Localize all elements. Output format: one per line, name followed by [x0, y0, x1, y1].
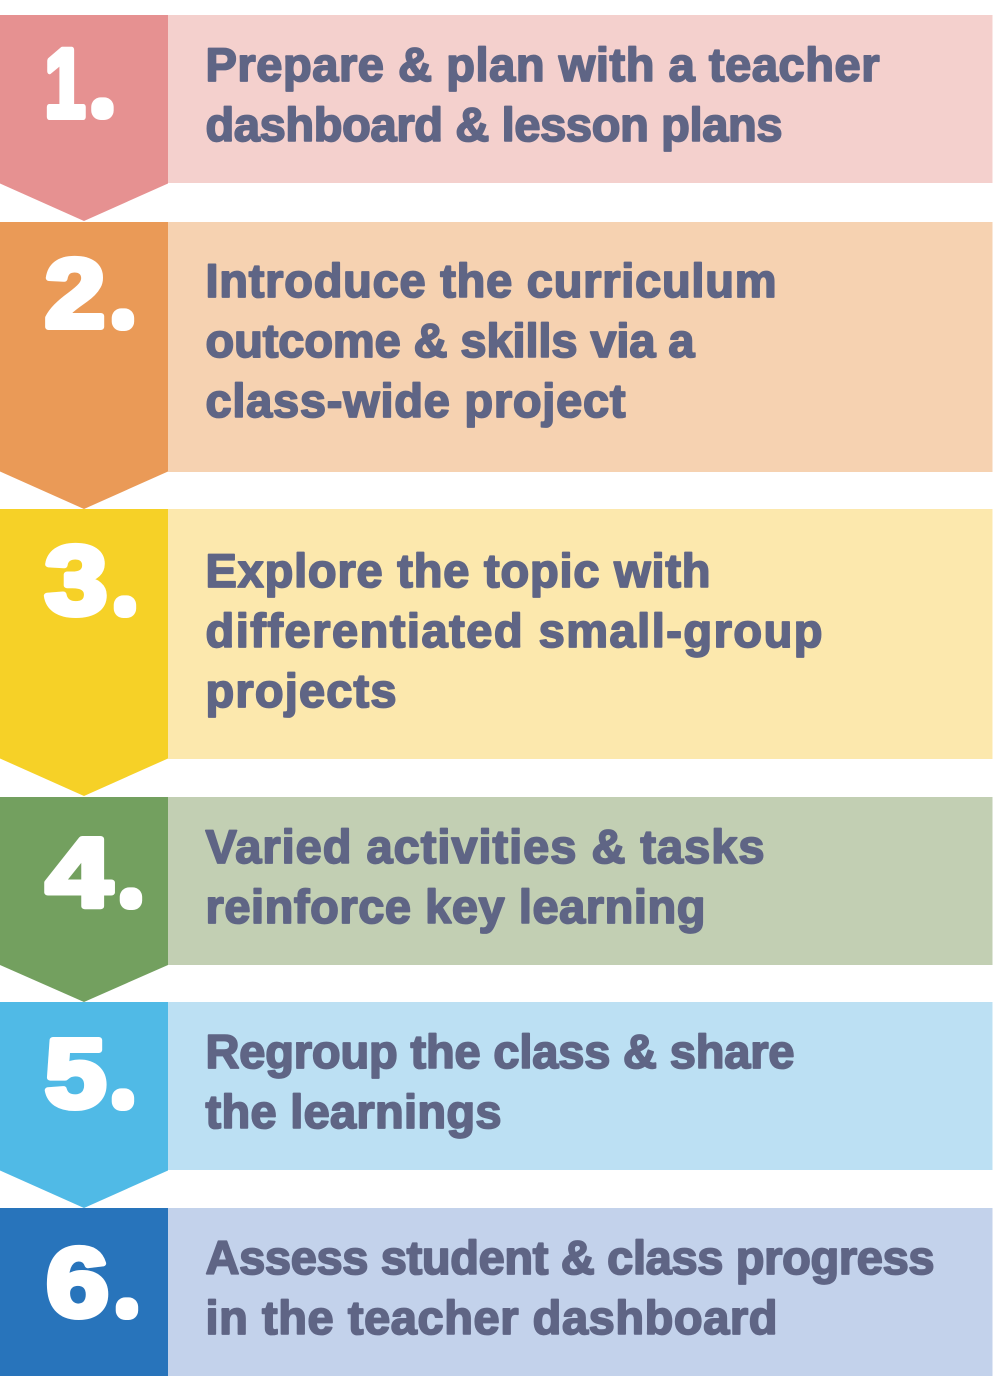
text: step 2: class-wide project — [206, 374, 626, 427]
arrow: step 1 — [0, 15, 168, 221]
text: step 5: Regroup the class & share — [206, 1025, 794, 1078]
number 6: 6 — [46, 1229, 109, 1337]
step 6 band — [168, 1208, 992, 1376]
number 1: 1 — [45, 30, 85, 138]
step 2 band — [168, 222, 992, 472]
panel: step 6 — [0, 1208, 992, 1376]
panel: step 1 — [0, 15, 992, 221]
text: step 4: Varied activities & tasks — [206, 820, 764, 873]
arrow: step 4 — [0, 797, 168, 1002]
text: step 4 — [206, 820, 764, 933]
text: step 6: in the teacher dashboard — [206, 1291, 778, 1344]
text: step 3 — [206, 544, 822, 717]
panel: step 3 — [0, 509, 992, 796]
step 1 band — [168, 15, 992, 183]
text: step 2: Introduce the curriculum — [206, 254, 776, 307]
text: step 2: outcome & skills via a — [206, 314, 695, 367]
number 5: 5 — [45, 1020, 106, 1128]
number 1 — [45, 30, 106, 138]
arrow: step 5 — [0, 1002, 168, 1208]
step 4 band — [168, 797, 992, 965]
step 5 band — [168, 1002, 992, 1170]
arrow: step 2 — [0, 222, 168, 509]
number 1: . — [99, 90, 106, 117]
text: step 3: projects — [206, 664, 396, 717]
text: step 1: dashboard & lesson plans — [206, 98, 782, 151]
text: step 6 — [206, 1231, 934, 1344]
number 4: 4 — [46, 818, 112, 927]
text: step 5 — [206, 1025, 794, 1138]
text: step 4: reinforce key learning — [206, 880, 706, 933]
text: step 3: differentiated small-group — [206, 604, 822, 657]
number 6: . — [124, 1290, 130, 1317]
number 5: . — [120, 1081, 126, 1108]
panel: step 2 — [0, 222, 992, 509]
arrow: step 3 — [0, 509, 168, 796]
text: step 1: Prepare & plan with a teacher — [206, 38, 880, 91]
arrow: step 6 — [0, 1208, 168, 1376]
number 3: . — [122, 588, 128, 615]
number 4: . — [128, 880, 134, 907]
text: step 2 — [206, 254, 776, 427]
text: step 3: Explore the topic with — [206, 544, 710, 597]
step 3 band — [168, 509, 992, 759]
panel: step 4 — [0, 797, 992, 1002]
number 3: 3 — [45, 527, 107, 635]
text: step 6: Assess student & class progress — [206, 1231, 934, 1284]
number 2: . — [120, 301, 126, 328]
text: step 5: the learnings — [206, 1085, 502, 1138]
number 2: 2 — [45, 239, 105, 348]
panel: step 5 — [0, 1002, 992, 1208]
text: step 1 — [206, 38, 880, 151]
